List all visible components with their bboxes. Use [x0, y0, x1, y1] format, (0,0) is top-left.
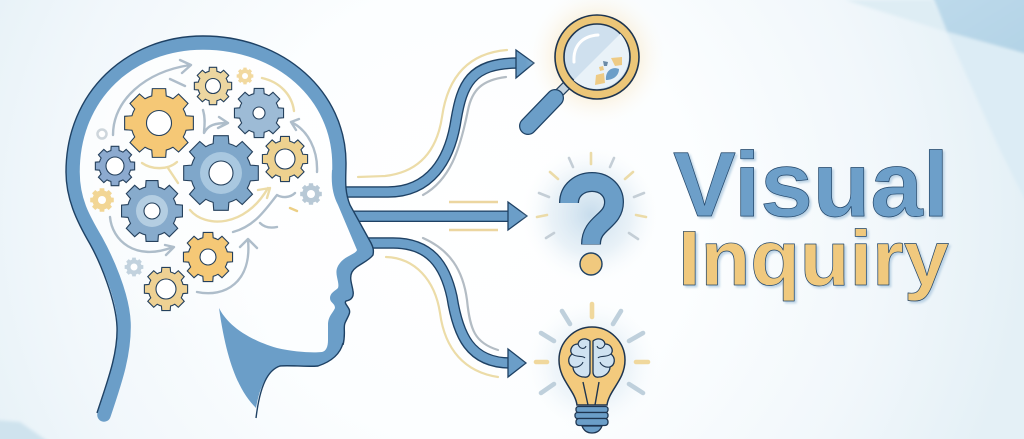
- head outline: [66, 36, 373, 415]
- gear: central blue: [184, 136, 258, 210]
- arrow: to question mark: [345, 202, 527, 230]
- accent lines: [449, 202, 498, 230]
- neck and jaw: [219, 308, 343, 408]
- gear: tiny hexagon: [98, 130, 106, 138]
- lens data shapes: [595, 57, 622, 85]
- title word: Inquiry: Inquiry: [678, 214, 949, 302]
- arrow: to magnifier: [342, 50, 534, 195]
- glass: [559, 327, 625, 405]
- brain: [569, 339, 614, 377]
- icon: light bulb with brain: [522, 295, 662, 435]
- gear: tiny yellow left: [90, 188, 114, 212]
- brain flow arrows: [110, 60, 317, 293]
- handle: [528, 84, 568, 126]
- icon: magnifying glass: [525, 0, 669, 129]
- outer contour line: [66, 36, 373, 413]
- jaw edge line: [256, 343, 343, 418]
- filaments: [583, 382, 599, 405]
- gear: blue top right: [234, 88, 284, 138]
- lens: [555, 15, 639, 99]
- gear: bottom tan: [144, 267, 188, 311]
- panel: head profile: [66, 36, 373, 418]
- title: [673, 134, 949, 302]
- gear: right yellow: [262, 136, 308, 182]
- base: [575, 406, 608, 433]
- gear: lower yellow: [183, 232, 233, 282]
- icon: question mark: [519, 143, 663, 287]
- title word: Visual: Visual: [673, 134, 949, 236]
- head interior: [73, 43, 360, 416]
- gear: tiny yellow top: [237, 68, 253, 84]
- gear: small left blue: [95, 146, 135, 186]
- gear: large yellow: [125, 89, 193, 157]
- glyph: [569, 182, 614, 244]
- accent lines: [358, 50, 507, 195]
- gear: tiny blue right: [300, 183, 322, 205]
- rays: [537, 153, 646, 239]
- rays: [536, 304, 648, 393]
- arrow: to light bulb: [360, 238, 526, 377]
- gears: [95, 67, 308, 311]
- accent lines: [386, 238, 498, 377]
- gear: lower left blue: [122, 181, 182, 241]
- gear: top tan: [194, 67, 232, 105]
- gear: tiny blue bottom: [125, 258, 143, 276]
- face band: [328, 165, 373, 345]
